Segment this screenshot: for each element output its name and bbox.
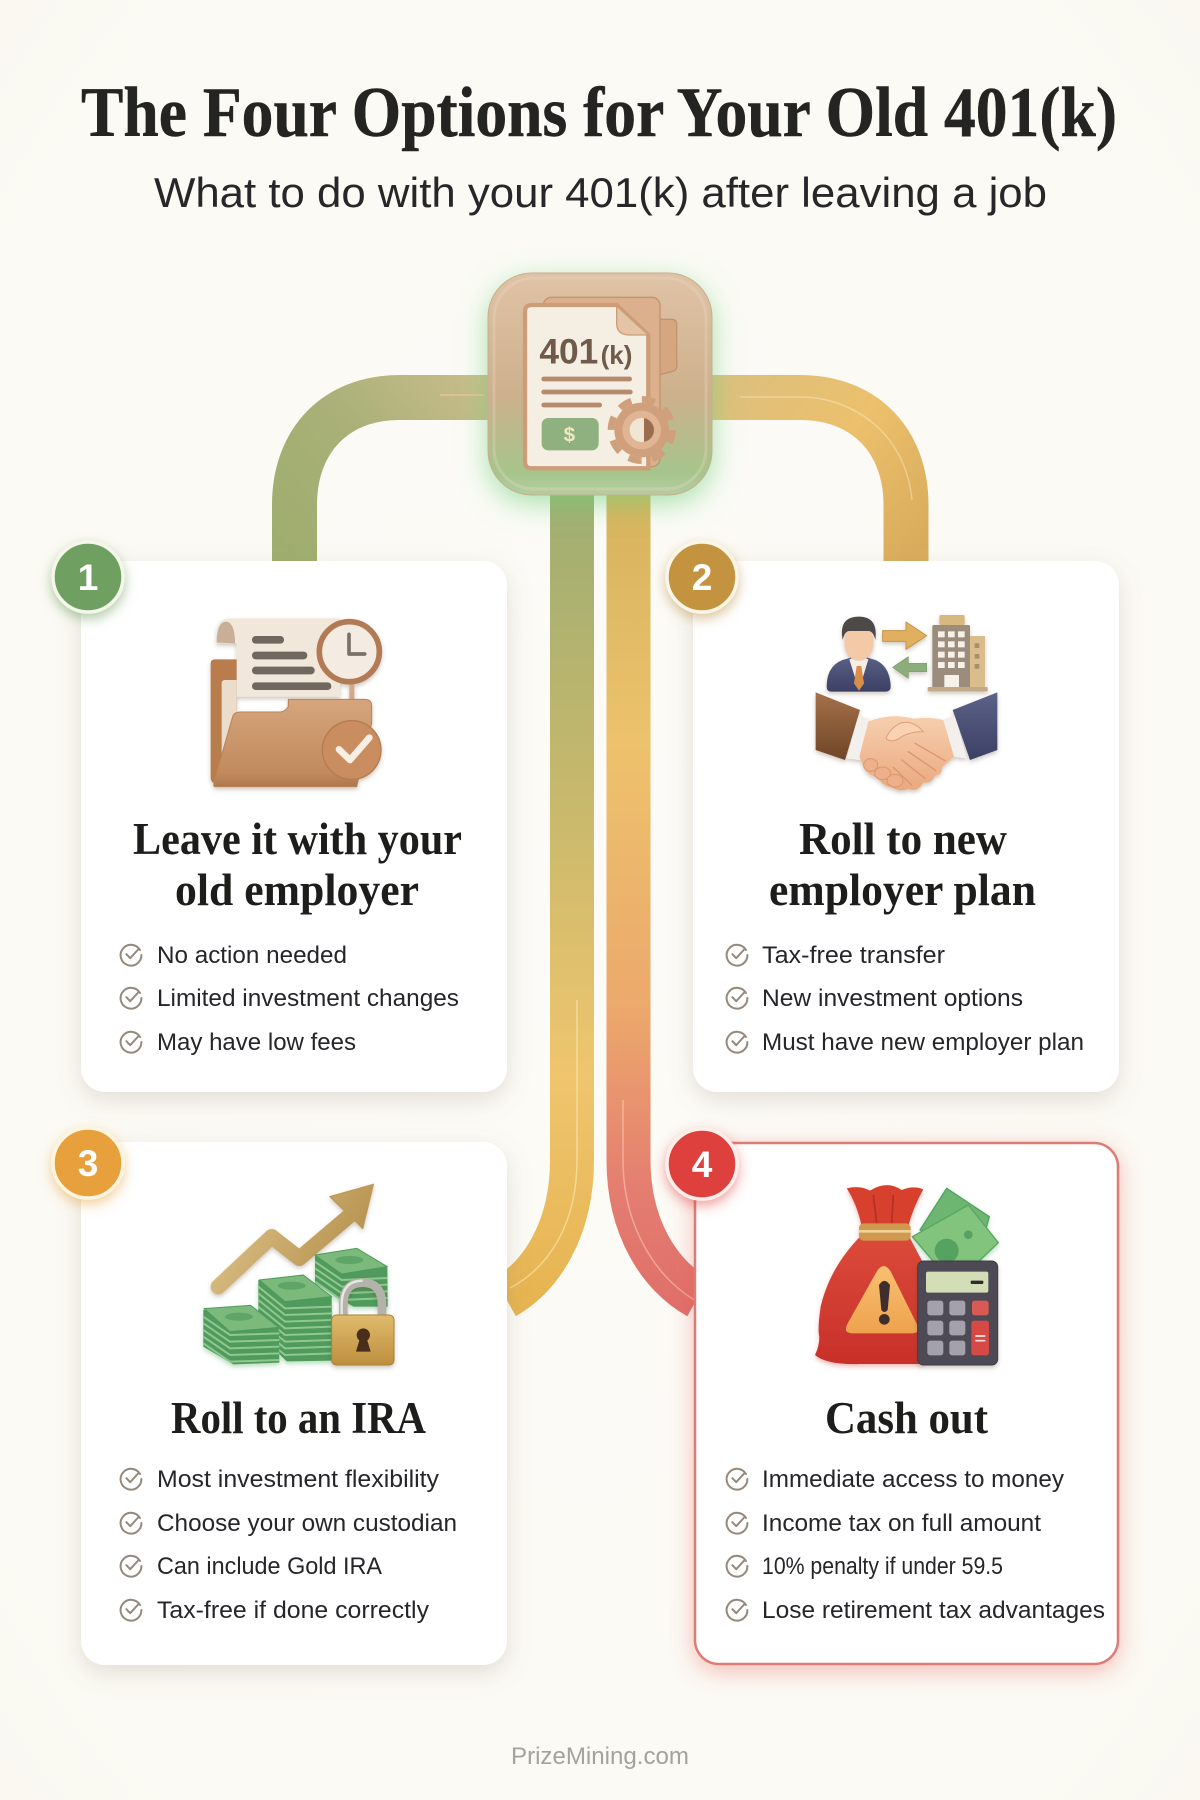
heading: Leave it with your — [133, 814, 462, 864]
checklist: Must have new employer plan — [762, 1029, 1084, 1056]
badge 2: 2 — [692, 557, 712, 598]
checklist: Choose your own custodian — [157, 1510, 457, 1537]
checklist: 10% penalty if under 59.5 — [762, 1553, 1003, 1580]
heading — [769, 814, 1036, 915]
folder behind document — [660, 319, 677, 375]
badge 1: 1 — [78, 557, 98, 598]
checklist: Limited investment changes — [157, 985, 459, 1012]
checklist: May have low fees — [157, 1029, 356, 1056]
building — [939, 615, 965, 625]
arrows — [883, 622, 927, 649]
icon: folder with document and clock — [211, 618, 381, 787]
calculator — [918, 1261, 998, 1365]
icon: growth arrow, cash stacks and lock — [203, 1184, 394, 1365]
heading: old employer — [175, 865, 419, 915]
money bag — [815, 1185, 923, 1364]
badge 1 — [53, 542, 123, 612]
person — [827, 654, 891, 692]
checklist: Lose retirement tax advantages — [762, 1597, 1105, 1624]
card 4: cash out — [695, 1143, 1118, 1664]
gold growth arrow — [218, 1184, 373, 1287]
badge 3: 3 — [78, 1143, 98, 1184]
heading: Cash out — [825, 1393, 988, 1443]
central 401(k) hub icon: (k) — [601, 340, 632, 370]
central 401(k) hub icon: $ — [564, 423, 576, 446]
heading: employer plan — [769, 865, 1036, 915]
warning triangle — [846, 1266, 918, 1333]
checklist: Immediate access to money — [762, 1466, 1065, 1493]
document sheet — [525, 305, 648, 468]
footer: PrizeMining.com — [511, 1743, 689, 1770]
checklist: Tax-free transfer — [762, 942, 945, 969]
heading: Roll to an IRA — [171, 1393, 426, 1443]
icon: person, building and handshake — [816, 615, 997, 790]
cash stack middle — [258, 1275, 332, 1361]
central 401(k) hub icon: 401 — [539, 332, 598, 371]
checklist — [727, 1466, 1105, 1624]
checklist: Can include Gold IRA — [157, 1553, 383, 1580]
banknotes — [912, 1188, 998, 1263]
checklist: New investment options — [762, 985, 1023, 1012]
connector paths from hub to the four cards — [294, 395, 912, 1302]
central 401(k) hub icon — [488, 273, 712, 495]
icon: money bag, warning, cash and calculator — [815, 1185, 998, 1365]
badge 4 — [667, 1129, 737, 1199]
checklist: No action needed — [157, 942, 347, 969]
badge 3 — [53, 1128, 123, 1198]
path to card 4 — [623, 494, 698, 1302]
dollar bill — [542, 418, 599, 450]
checklist — [121, 1466, 457, 1624]
path to card 3 — [505, 494, 577, 1297]
path to card 1 — [294, 395, 490, 563]
checklist: Tax-free if done correctly — [157, 1597, 430, 1624]
padlock — [332, 1281, 394, 1365]
card 1: leave it with your old employer — [81, 561, 507, 1092]
cash stack back — [315, 1248, 388, 1307]
cuffs — [847, 715, 870, 760]
card 3: roll to an IRA — [81, 1142, 507, 1665]
card 2: roll to new employer plan — [693, 561, 1119, 1092]
checklist: Most investment flexibility — [157, 1466, 440, 1493]
hands — [859, 716, 954, 790]
cash stack front — [203, 1305, 279, 1364]
checklist — [121, 942, 459, 1056]
gear — [611, 399, 672, 461]
checklist — [727, 942, 1084, 1056]
path to card 2 — [710, 397, 912, 563]
badge 4: 4 — [692, 1144, 713, 1185]
subtitle: What to do with your 401(k) after leaving a job — [154, 169, 1047, 216]
heading: Roll to new — [799, 814, 1007, 864]
badge 2 — [667, 542, 737, 612]
checklist: Income tax on full amount — [762, 1510, 1041, 1537]
heading — [133, 814, 462, 915]
